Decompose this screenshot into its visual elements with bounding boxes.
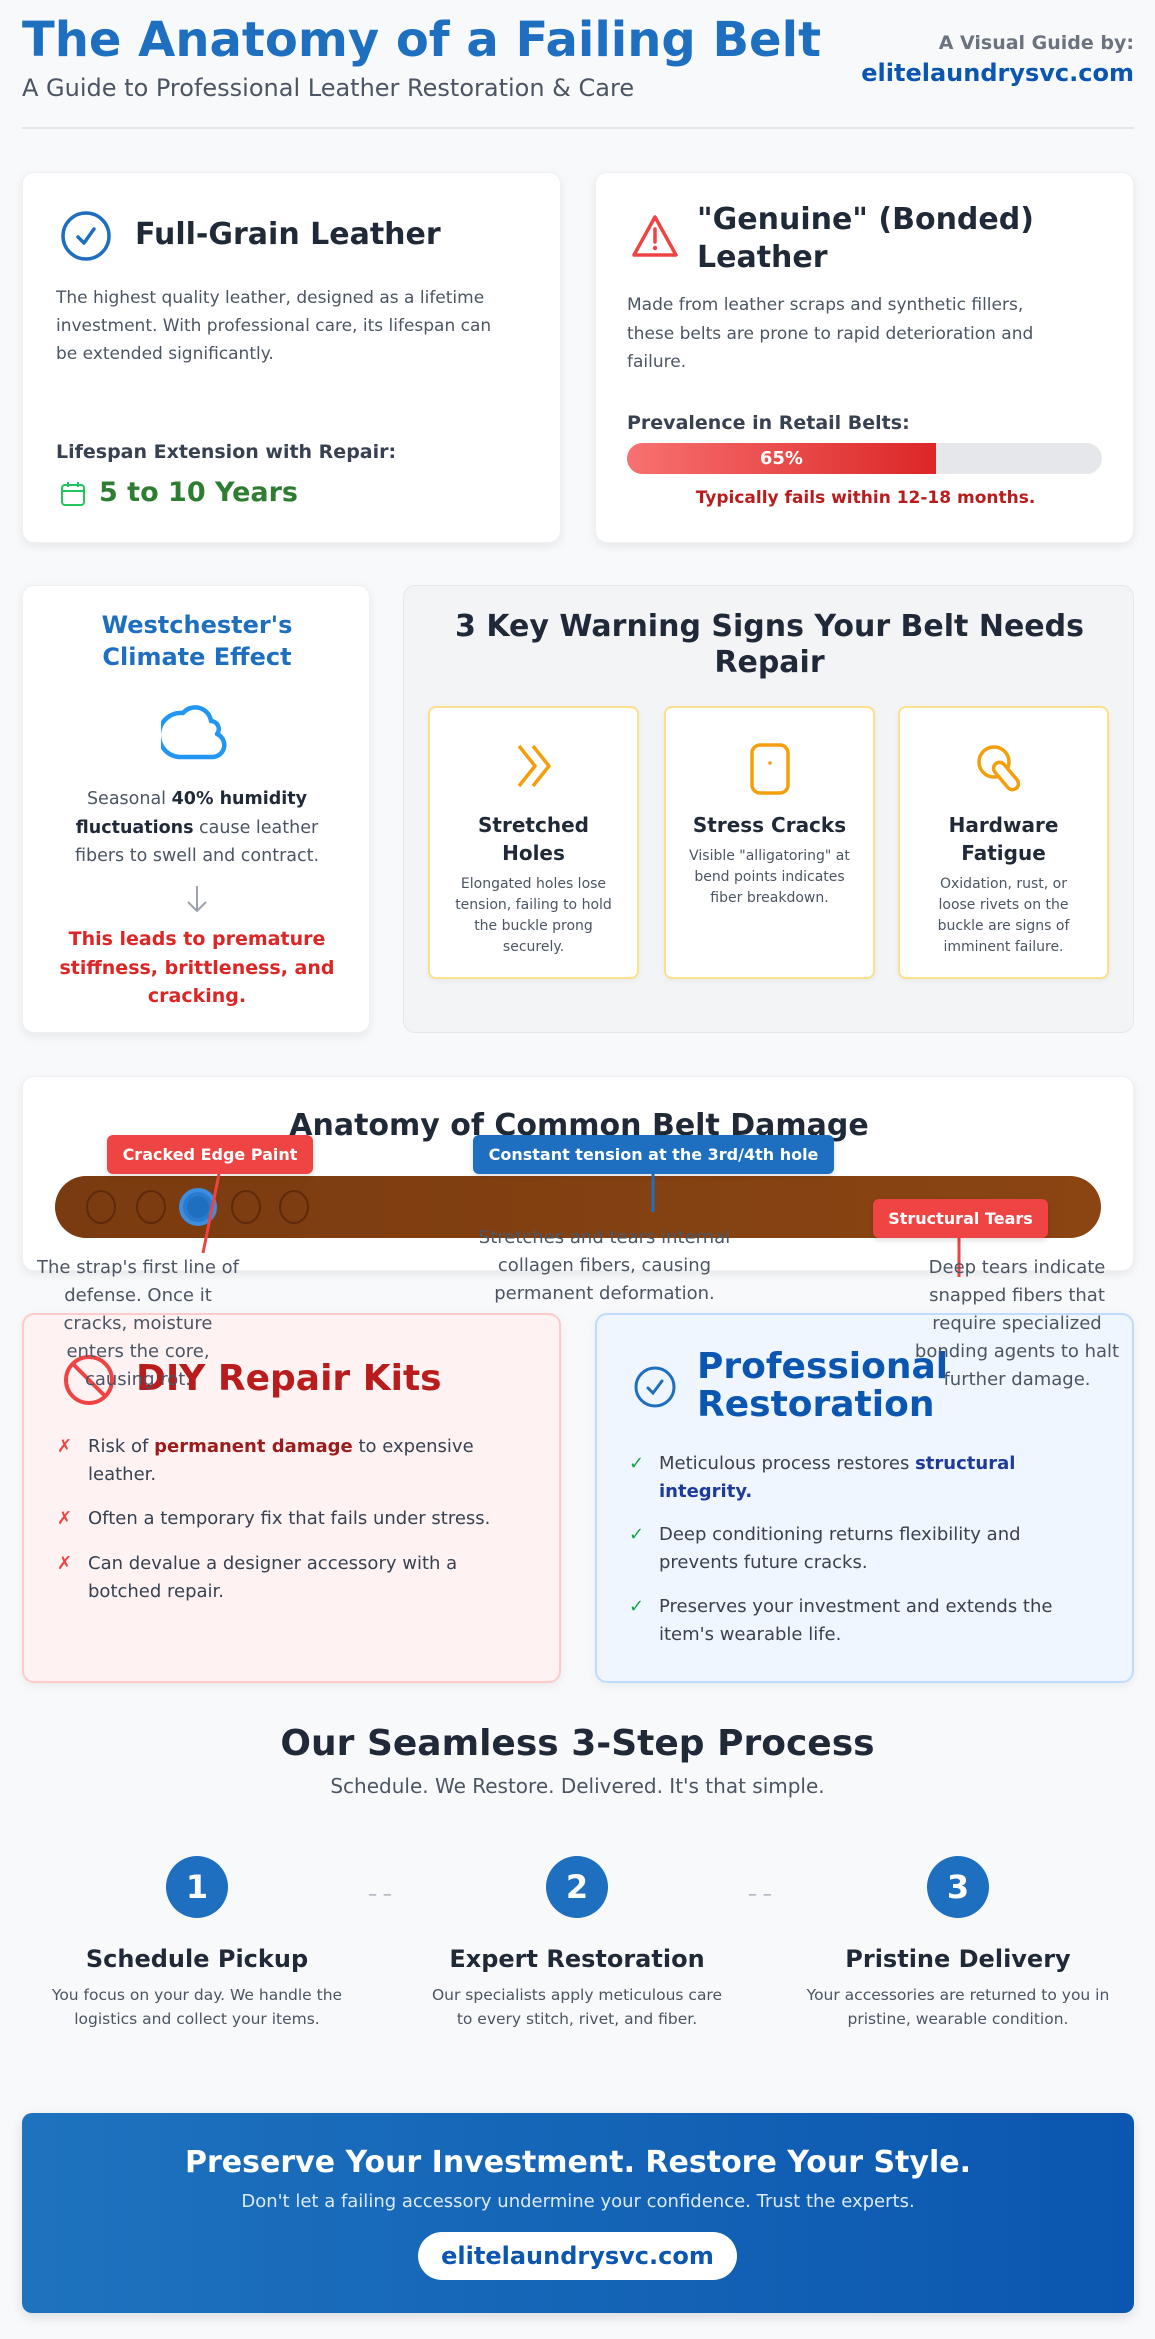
consequence text: This leads to premature stiffness, brittleness, and cracking. (59, 928, 335, 1007)
arrow: dashes 2: – – (748, 1884, 772, 1905)
icon: check circle (61, 211, 111, 261)
step 3: Your accessories are returned to you in pristine, wearable condition. (807, 1986, 1109, 2028)
step 2: Our specialists apply meticulous care to every stitch, rivet, and fiber. (432, 1986, 722, 2028)
icon: phone-like rect (750, 743, 790, 795)
header byline (861, 32, 1134, 87)
sign: hardware fatigue (898, 706, 1109, 979)
heading: Climate Effect (102, 643, 292, 671)
bar chart: 65% (627, 443, 1102, 474)
list: Meticulous process restores structural integrity. (659, 1453, 1015, 1502)
header subtitle: A Guide to Professional Leather Restoration & Care (22, 74, 634, 102)
list: ✗ (57, 1553, 72, 1574)
CTA button (418, 2232, 737, 2280)
process subtitle: Schedule. We Restore. Delivered. It's that simple. (330, 1774, 825, 1798)
icon: calendar (61, 482, 85, 506)
step 3 (806, 1856, 1109, 2028)
sign: stretched holes: Stretched (478, 813, 589, 837)
callout text: tears: Deep tears indicate snapped fibers that require specialized bonding agents to halt further damage. (915, 1257, 1119, 1390)
header title: The Anatomy of a Failing Belt (22, 12, 821, 68)
belt holes (86, 1188, 309, 1226)
panel: professional restoration (595, 1313, 1134, 1683)
tag: constant tension: Constant tension at the 3rd/4th hole (489, 1145, 818, 1164)
panel: DIY repair kits (22, 1313, 561, 1683)
heading: Full-Grain Leather (135, 217, 441, 252)
list: ✓ (629, 1596, 644, 1617)
sign: stress cracks: Stress Cracks (693, 813, 846, 837)
list: Preserves your investment and extends the item's wearable life. (659, 1596, 1052, 1645)
list: ✗ (57, 1436, 72, 1457)
body text: Seasonal 40% humidity fluctuations cause leather fibers to swell and contract. (75, 789, 319, 866)
sign: hardware fatigue: Fatigue (961, 841, 1046, 865)
sign: stretched holes: Elongated holes lose tension, failing to hold the buckle prong securely. (455, 876, 612, 955)
step 3: 3 (947, 1868, 969, 1906)
heading: Repair (714, 645, 825, 680)
list (57, 1436, 490, 1602)
step 1 (52, 1856, 342, 2028)
sign: stretched holes: Holes (502, 841, 565, 865)
heading (697, 1346, 948, 1425)
list: Can devalue a designer accessory with a botched repair. (88, 1553, 457, 1602)
panel: genuine bonded leather (595, 172, 1134, 543)
list: Often a temporary fix that fails under stress. (88, 1508, 490, 1529)
belt strap (55, 1176, 1101, 1238)
heading: DIY Repair Kits (136, 1358, 442, 1399)
step 1: You focus on your day. We handle the logistics and collect your items. (52, 1986, 342, 2028)
icon: prohibited (64, 1355, 114, 1405)
header byline: elitelaundrysvc.com (861, 59, 1134, 87)
header byline: A Visual Guide by: (939, 32, 1134, 54)
heading (697, 202, 1034, 275)
step 2: 2 (566, 1868, 588, 1906)
body text: The highest quality leather, designed as a lifetime investment. With professional care, its lifespan can be extended significantly. (56, 288, 491, 364)
step 3: Pristine Delivery (845, 1945, 1071, 1973)
heading: 3 Key Warning Signs Your Belt Needs (455, 609, 1084, 644)
heading: Anatomy of Common Belt Damage (289, 1108, 869, 1143)
icon: chevrons (518, 744, 551, 788)
step 2 (432, 1856, 722, 2028)
list: ✓ (629, 1453, 644, 1474)
step 1: Schedule Pickup (86, 1945, 308, 1973)
list: Risk of permanent damage to expensive leather. (88, 1436, 474, 1485)
list: ✗ (57, 1508, 72, 1529)
arrow: dashes 1: – – (368, 1884, 392, 1905)
lifespan label: Lifespan Extension with Repair: (56, 441, 396, 463)
CTA button: elitelaundrysvc.com (441, 2242, 714, 2270)
panel: full-grain leather (22, 172, 561, 543)
icon: warning triangle (632, 215, 678, 257)
sign: stress cracks: Visible "alligatoring" at bend points indicates fiber breakdown. (689, 848, 850, 906)
bar chart: 65%: 65% (760, 448, 803, 469)
heading (102, 611, 292, 671)
prevalence label: Prevalence in Retail Belts: (627, 412, 910, 434)
body text: Made from leather scraps and synthetic fillers, these belts are prone to rapid deterioration and failure. (627, 295, 1033, 372)
process heading: Our Seamless 3-Step Process (280, 1723, 875, 1764)
tag: cracked edge paint: Cracked Edge Paint (123, 1145, 297, 1164)
failure note: Typically fails within 12-18 months. (696, 488, 1035, 508)
heading: Leather (697, 240, 828, 275)
tag: cracked edge paint (107, 1135, 313, 1174)
callout text: tension: Stretches and tears internal collagen fibers, causing permanent deformation. (479, 1227, 730, 1304)
sign: hardware fatigue: Oxidation, rust, or loose rivets on the buckle are signs of imminent failure. (938, 876, 1069, 955)
tag: constant tension (473, 1135, 834, 1174)
heading: "Genuine" (Bonded) (697, 202, 1034, 237)
panel: climate effect (22, 585, 370, 1033)
callout text: cracked edge: The strap's first line of defense. Once it cracks, moisture enters the core, causing rot. (37, 1257, 239, 1390)
pointer lines (202, 1174, 960, 1277)
heading: Professional (697, 1346, 948, 1387)
heading (455, 609, 1084, 680)
tag: structural tears (873, 1199, 1048, 1238)
step 2: Expert Restoration (449, 1945, 705, 1973)
heading: Restoration (697, 1384, 934, 1425)
tag: structural tears: Structural Tears (888, 1209, 1033, 1228)
sign: stress cracks (664, 706, 875, 979)
arrow down (187, 886, 207, 912)
panel: warning signs (403, 585, 1134, 1033)
list (629, 1453, 1052, 1645)
CTA subtext: Don't let a failing accessory undermine your confidence. Trust the experts. (241, 2191, 915, 2212)
lifespan value: 5 to 10 Years (99, 477, 298, 508)
icon: cloud (161, 705, 226, 760)
list: Deep conditioning returns flexibility and prevents future cracks. (659, 1524, 1021, 1573)
list: ✓ (629, 1524, 644, 1545)
panel: belt anatomy (22, 1076, 1134, 1271)
sign: hardware fatigue: Hardware (949, 813, 1058, 837)
sign: stretched holes (428, 706, 639, 979)
step 1: 1 (186, 1868, 208, 1906)
belt diagram (55, 1135, 1101, 1277)
icon: wrench (977, 745, 1020, 792)
CTA banner (22, 2113, 1134, 2313)
icon: check circle (634, 1366, 676, 1408)
heading: Westchester's (102, 611, 292, 639)
CTA heading: Preserve Your Investment. Restore Your Style. (185, 2145, 971, 2180)
